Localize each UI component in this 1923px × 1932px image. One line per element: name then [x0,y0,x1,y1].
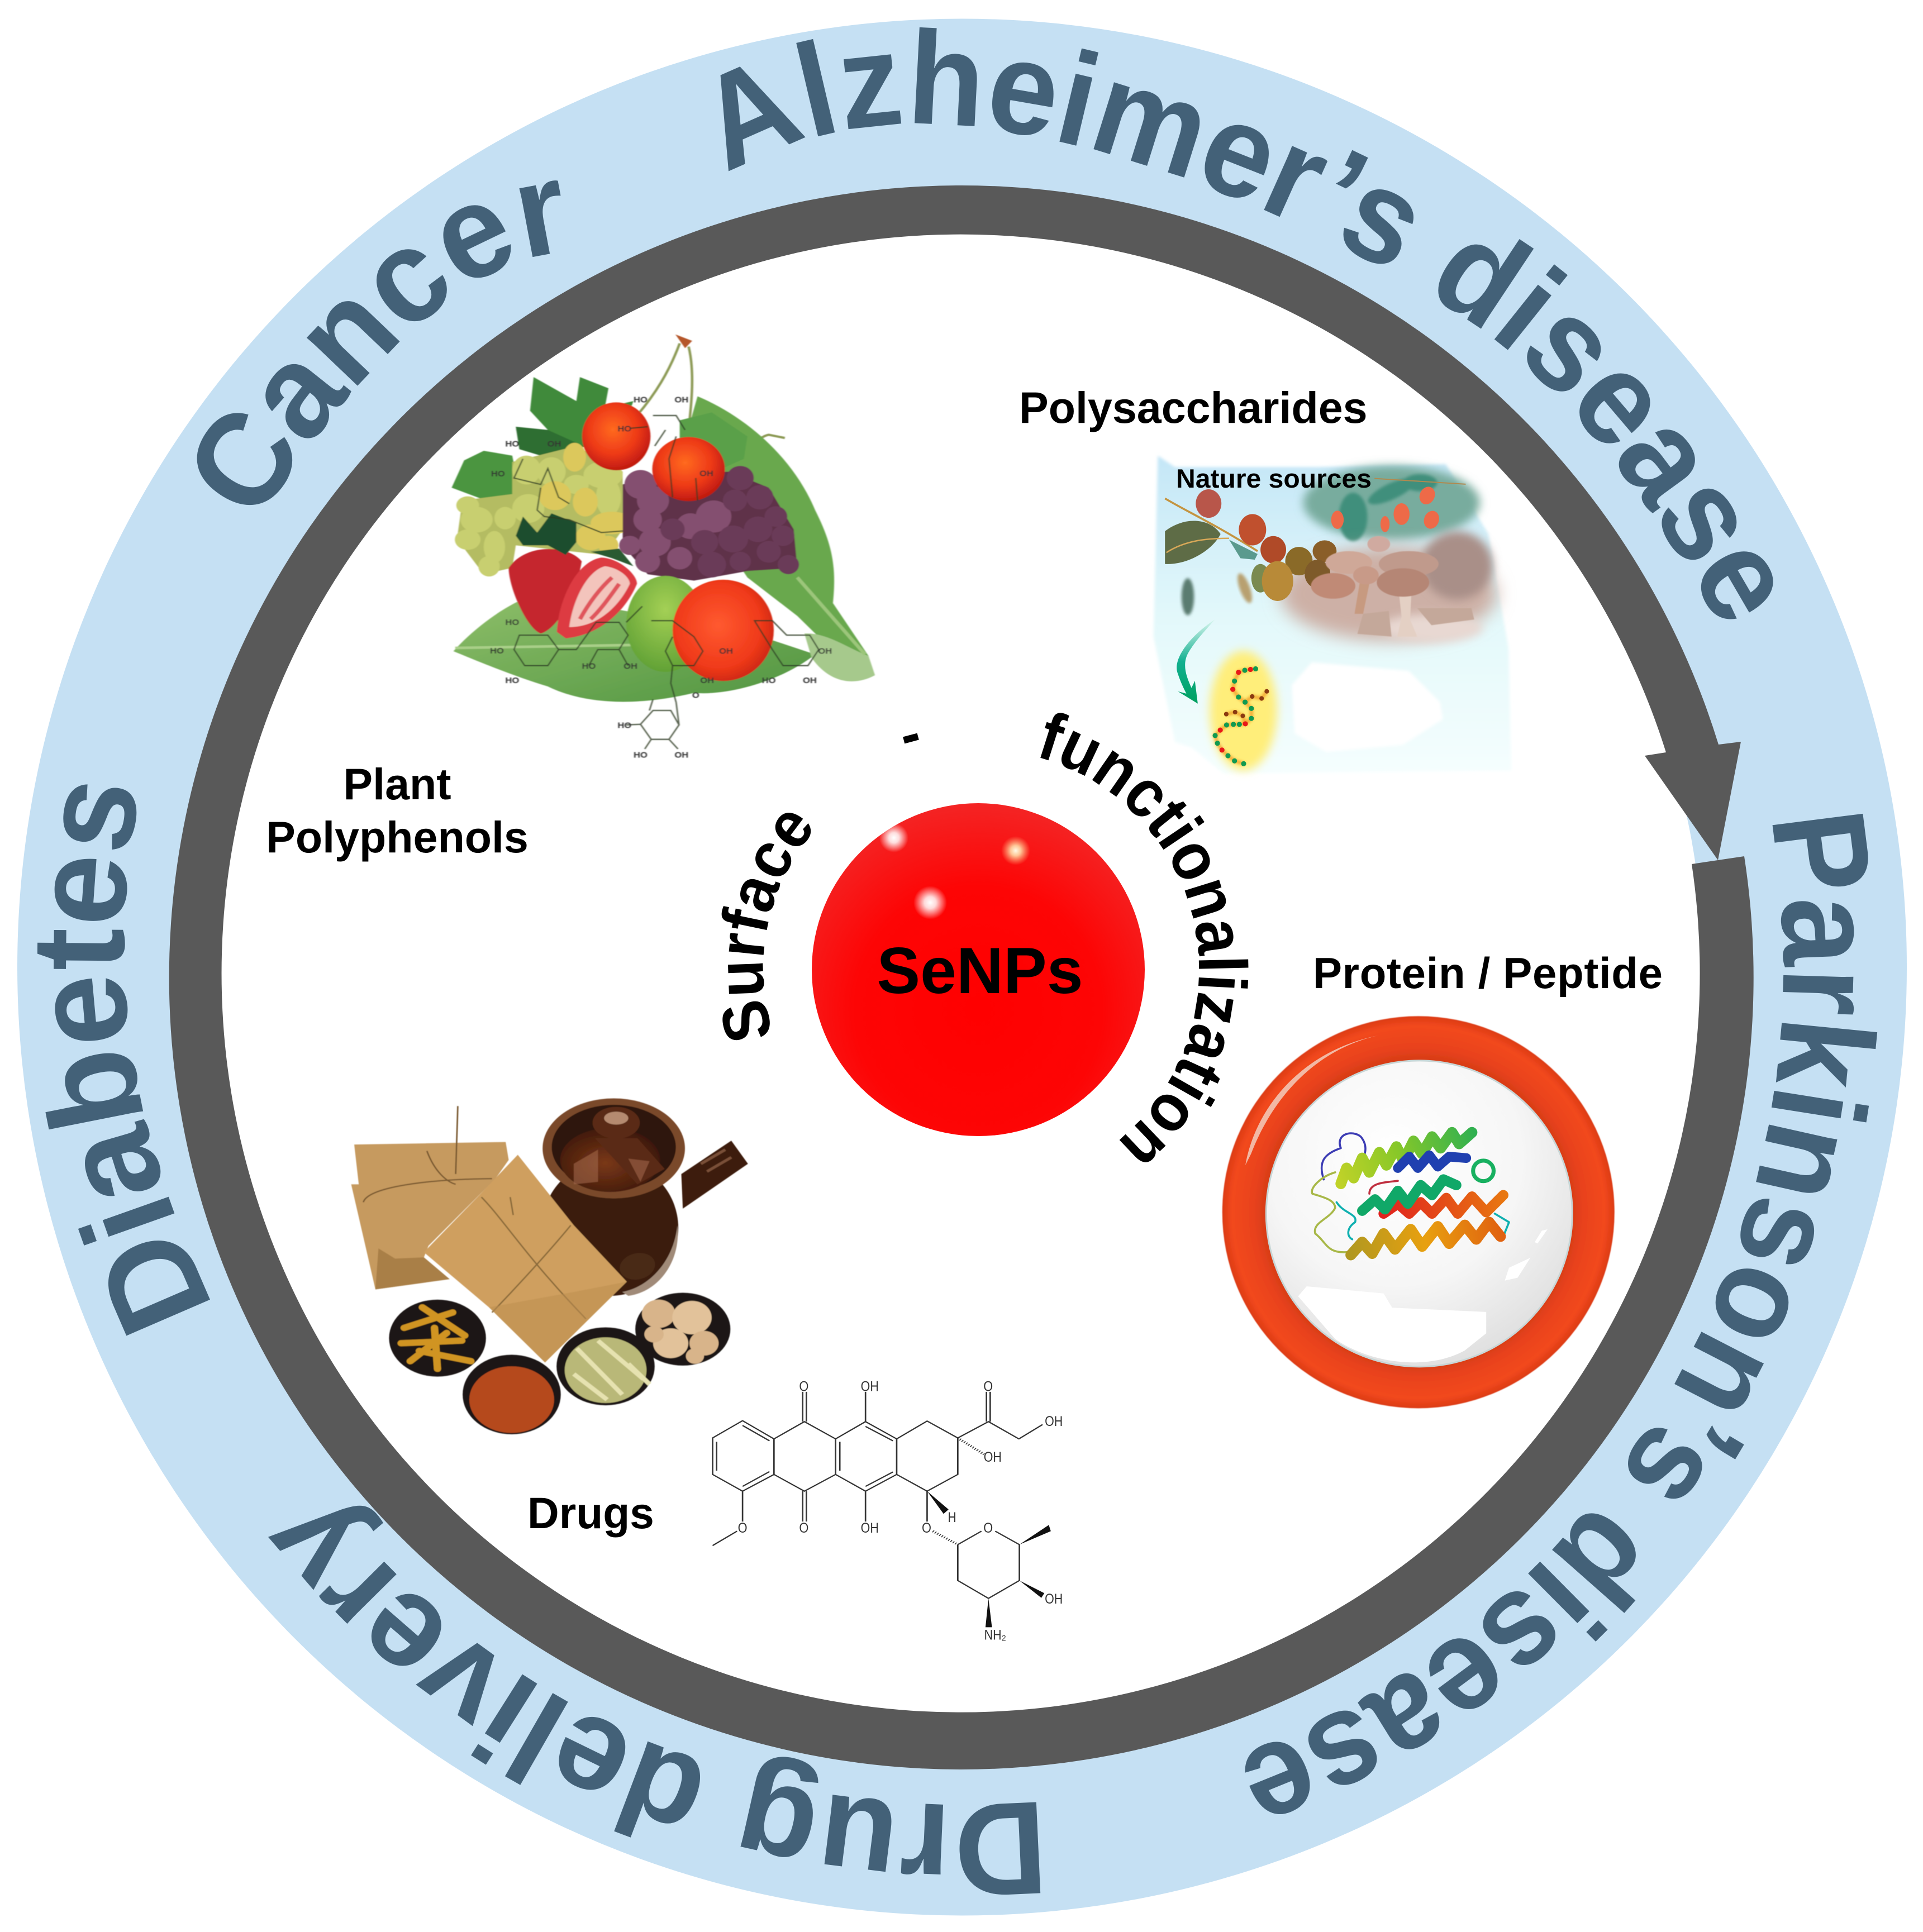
image: doxorubicin chemical structure: O [983,1520,993,1536]
jujube fruits [1196,489,1221,518]
image: doxorubicin chemical structure: O [799,1379,808,1395]
cherries [582,402,650,470]
central SeNPs nanoparticle: SeNPs [877,934,1083,1007]
label: Polysaccharides: Polysaccharides [1019,383,1368,432]
image: doxorubicin chemical structure: O [738,1520,748,1536]
red ring [1222,1016,1615,1408]
image: fruits with polyphenol structures: HO [505,618,519,627]
image: fruits with polyphenol structures: OH [700,676,714,685]
image: fruits with polyphenol structures: OH [674,751,688,760]
green grapes [457,446,623,574]
image: fruits with polyphenol structures: OH [674,395,688,404]
image: doxorubicin chemical structure: O [922,1520,931,1536]
yellow polysaccharide halo [1210,651,1277,771]
label: Plant Polyphenols: Polyphenols [266,812,529,862]
ceramic pot [542,1099,748,1296]
image: doxorubicin chemical structure: O [799,1520,808,1536]
curved label: hyphen: - [892,700,927,768]
ring label: Parkinson's disease: Parkinson’s disease [1245,813,1877,1814]
green curved arrow [1177,619,1215,704]
image: doxorubicin chemical structure: OH [984,1449,1002,1465]
image: polysaccharide nature sources [1154,456,1511,774]
ring label: Alzheimer's disease: Alzheimer’s disease [721,27,1773,619]
image: fruits with polyphenol structures: HO [634,395,648,404]
image: doxorubicin chemical structure [713,1379,1063,1643]
ring label: Drug delivery: Drug delivery [268,1506,1040,1895]
herb bowl: red seeds [463,1355,561,1434]
image: fruits with polyphenol structures: OH [623,662,637,671]
herb bowl: yellow sticks [389,1300,486,1377]
label: Nature sources: Nature sources [1176,464,1372,493]
ring label: Cancer: Cancer [197,180,561,505]
goji berries [1331,484,1441,532]
image: fruits with polyphenol structures: O [692,691,699,700]
image: fruits with polyphenol structures: HO [505,440,519,449]
image: fruits with polyphenol structures: OH [548,440,561,449]
curved label: Surface: Surface [722,813,811,1040]
image: protein in red ring capsule [1222,1016,1615,1408]
front paper packet [424,1155,627,1362]
image: doxorubicin chemical structure: OH [861,1520,879,1536]
label: Plant Polyphenols [266,759,529,862]
white masked area [1292,662,1443,752]
protein ribbon [1312,1132,1509,1255]
polysaccharide chain [1212,666,1269,766]
image: traditional Chinese herbs [351,1099,748,1434]
inner white disc [217,230,1703,1715]
image: fruits with polyphenol structures: OH [803,676,817,685]
stems [637,344,785,464]
image: fruits with polyphenol structures [451,335,875,760]
image: doxorubicin chemical structure: OH [1045,1414,1063,1429]
image: doxorubicin chemical structure: OH [861,1379,879,1395]
circular arrow [169,185,1754,1769]
lime and apple [626,576,705,672]
image: fruits with polyphenol structures: HO [762,676,776,685]
back paper packet [351,1142,508,1290]
curved label: functionalization: functionalization [1040,713,1248,1162]
image: fruits with polyphenol structures: HO [617,721,631,730]
strawberries [508,549,582,633]
image: fruits with polyphenol structures: OH [699,469,713,478]
purple grapes [623,471,797,581]
image: fruits with polyphenol structures: HO [617,424,631,433]
central SeNPs nanoparticle [812,803,1145,1136]
herb bowl: sliced root [635,1292,730,1366]
image: fruits with polyphenol structures: OH [719,647,733,656]
image: doxorubicin chemical structure: O [983,1379,993,1395]
image: doxorubicin chemical structure: OH [1045,1591,1063,1607]
image: fruits with polyphenol structures: HO [634,751,648,760]
blurred foliage and mushrooms [1303,466,1480,540]
label: Plant Polyphenols: Plant [343,759,451,809]
label: Drugs: Drugs [527,1489,654,1538]
leaves [676,397,869,656]
ring label: Diabetes: Diabetes [37,784,210,1336]
polyphenol structure lines [514,416,818,749]
mushrooms [1311,536,1474,637]
image: fruits with polyphenol structures: HO [491,470,505,479]
image: fruits with polyphenol structures: OH [818,647,832,656]
image: fruits with polyphenol structures: HO [490,647,504,656]
image: fruits with polyphenol structures: HO [582,662,596,671]
image: fruits with polyphenol structures: HO [505,676,519,685]
label: Protein / Peptide: Protein / Peptide [1313,948,1663,998]
image: doxorubicin chemical structure: H [948,1510,956,1525]
glass interior [1266,1061,1572,1367]
image: doxorubicin chemical structure: NH₂ [984,1628,1006,1643]
herb bowl: green slices [556,1327,655,1405]
